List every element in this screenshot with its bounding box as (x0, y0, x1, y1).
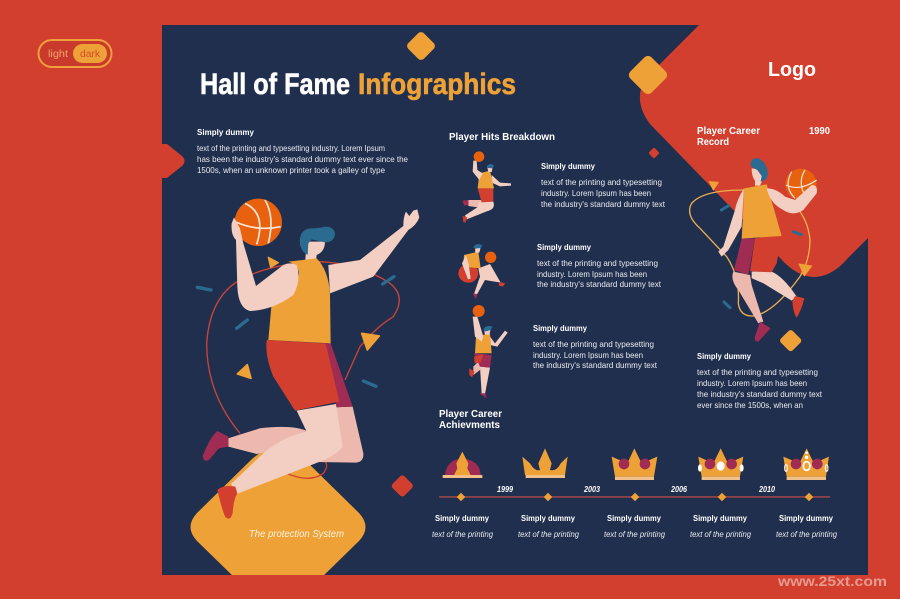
timeline labels: Simply dummy (693, 513, 747, 523)
protection label: The protection System (249, 529, 344, 540)
text block: hit two (537, 242, 662, 289)
text block: hit one: text of the printing and typesetting (541, 177, 662, 187)
heading: player hits breakdown: Player Hits Breakdown (449, 131, 555, 143)
text block: career record: the industry's standard dummy text (697, 389, 823, 399)
icon: crown four (698, 448, 744, 480)
text block: career record (697, 351, 823, 410)
timeline: 2010 (758, 484, 775, 494)
text block: career record: text of the printing and typesetting (697, 367, 818, 377)
panel: navy board (162, 25, 868, 575)
text block: intro: Simply dummy (197, 127, 254, 137)
decor: diamonds on board (162, 30, 669, 178)
text block: hit three: Simply dummy (533, 323, 587, 333)
timeline labels: Simply dummy (607, 513, 661, 523)
icon: crown one (443, 452, 482, 478)
text block: hit two: industry. Lorem Ipsum has been (537, 269, 647, 279)
timeline labels: text of the printing (776, 529, 837, 539)
logo: Logo (768, 59, 816, 81)
icon: player two (458, 244, 505, 299)
text block: hit three: the industry's standard dummy text (533, 360, 658, 370)
toggle: light dark: light (48, 49, 68, 60)
panel: red corner shape (640, 25, 868, 277)
text block: intro (197, 127, 408, 175)
heading: player career achievements: Achievments (439, 419, 500, 431)
illustration: right player (690, 158, 817, 352)
text block: hit two: Simply dummy (537, 242, 591, 252)
heading: player career record: Record (697, 136, 729, 148)
text block: hit two: text of the printing and typesetting (537, 258, 658, 268)
timeline labels (432, 513, 837, 539)
text block: hit one (541, 161, 666, 209)
text block: intro: 1500s, when an unknown printer took a galley of type (197, 165, 385, 175)
icon: crown three (612, 448, 657, 480)
text block: hit one: the industry's standard dummy text (541, 199, 666, 209)
timeline labels: Simply dummy (435, 513, 489, 523)
illustration: large player (197, 199, 419, 519)
small players (458, 151, 511, 398)
timeline labels: Simply dummy (521, 513, 575, 523)
icon: player three (469, 305, 508, 398)
timeline labels: text of the printing (432, 529, 493, 539)
heading: player career achievements (439, 408, 502, 431)
timeline labels: Simply dummy (779, 513, 833, 523)
heading: player career record (697, 125, 830, 148)
big orange diamond pedestal (190, 446, 366, 580)
title: Hall of Fame (200, 68, 350, 101)
text block: hit three (533, 323, 658, 370)
text block: hit three: industry. Lorem Ipsum has been (533, 350, 643, 360)
timeline: 2006 (670, 484, 687, 494)
heading: player career achievements: Player Career (439, 408, 502, 420)
text block: intro: text of the printing and typesetting industry. Lorem Ipsum (197, 143, 385, 153)
text block: hit one: industry. Lorem Ipsum has been (541, 188, 651, 198)
heading: player career record: Player Career (697, 125, 760, 137)
toggle: light dark (38, 40, 112, 67)
crowns row (443, 448, 829, 480)
toggle: light dark: dark (80, 49, 101, 60)
timeline labels: text of the printing (690, 529, 751, 539)
timeline: 2003 (583, 484, 600, 494)
text block: intro: has been the industry's standard dummy text ever since the (197, 154, 408, 164)
text block: career record: ever since the 1500s, when an (697, 400, 803, 410)
icon: player one (463, 151, 511, 223)
title (200, 68, 516, 101)
text block: hit one: Simply dummy (541, 161, 595, 171)
text block: hit three: text of the printing and typesetting (533, 339, 654, 349)
text block: career record: Simply dummy (697, 351, 751, 361)
icon: crown two (522, 448, 568, 478)
timeline (439, 484, 830, 501)
timeline labels: text of the printing (518, 529, 579, 539)
watermark: www.25xt.com (777, 573, 887, 589)
timeline: 1999 (497, 484, 513, 494)
title: Infographics (358, 68, 516, 101)
heading: player career record: 1990 (809, 125, 830, 137)
icon: crown five (783, 448, 829, 480)
text block: hit two: the industry's standard dummy text (537, 279, 662, 289)
text block: career record: industry. Lorem Ipsum has been (697, 378, 807, 388)
timeline labels: text of the printing (604, 529, 665, 539)
